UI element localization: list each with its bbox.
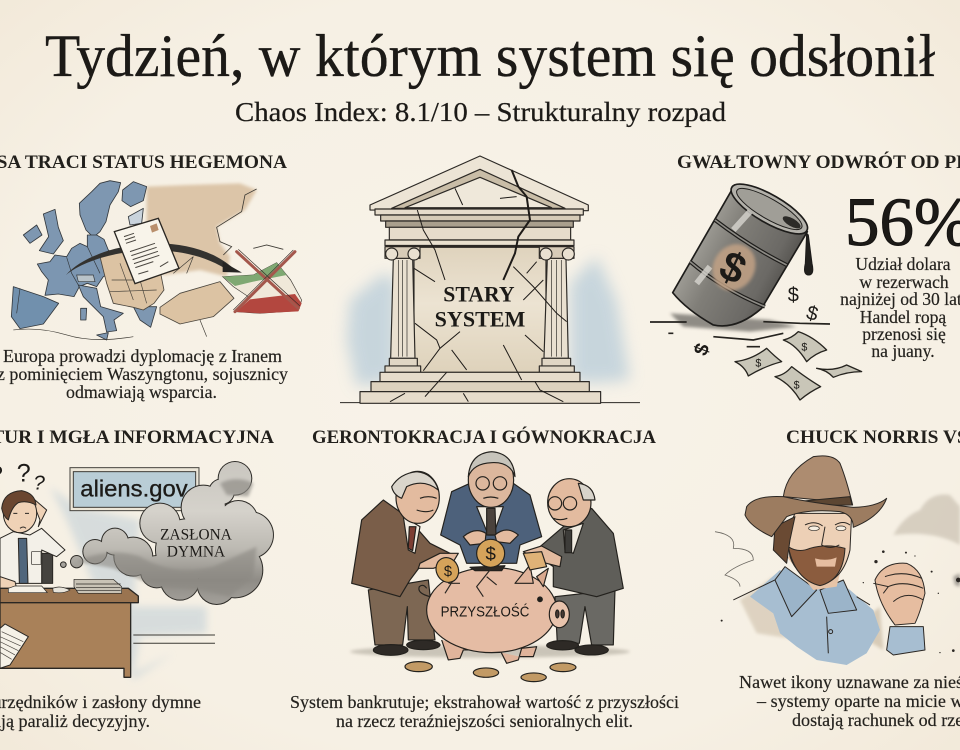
- fist: [875, 563, 925, 625]
- right man: [523, 479, 623, 655]
- temple label: STARY: [443, 282, 515, 306]
- caption: hegemony: [0, 346, 288, 402]
- temple illustration: [340, 156, 640, 403]
- loose dollar signs: $: [804, 302, 820, 326]
- old men and piggy bank illustration: $: [485, 543, 496, 564]
- stat caption: Udział dolara: [855, 254, 951, 274]
- dust specks: [721, 550, 960, 653]
- ground shadow: [350, 646, 630, 658]
- caption: Chuck Norris: [739, 672, 960, 730]
- oil drip: [804, 233, 813, 275]
- barrel dollar sign: $: [713, 241, 754, 293]
- question marks: ?: [33, 471, 45, 494]
- subtitle: Chaos Index: 8.1/10 – Strukturalny rozpad: [235, 97, 727, 127]
- oil barrel illustration: $: [794, 379, 800, 391]
- middle man: [441, 452, 542, 563]
- pig: [419, 565, 569, 663]
- heading: gerontocracy: GERONTOKRACJA I GÓWNOKRACJA: [312, 426, 656, 448]
- stat caption: przenosi się: [862, 324, 946, 344]
- right column: [544, 258, 568, 358]
- iran: [223, 263, 302, 313]
- cowboy portrait illustration: [715, 456, 960, 665]
- sign aliens.gov: [70, 468, 199, 511]
- smoke cloud: [60, 461, 274, 605]
- desk, clerk and smoke illustration: [0, 460, 274, 680]
- wall: [414, 247, 546, 372]
- old men and piggy bank illustration: $: [444, 564, 452, 580]
- left man: [352, 471, 458, 655]
- panel: Chuck Norris: [715, 427, 960, 730]
- eastern europe and turkey: [100, 250, 234, 324]
- stat caption: Handel ropą: [860, 307, 946, 327]
- document: [114, 218, 179, 284]
- map of Europe with arrow to Iran: [11, 181, 302, 340]
- smoke cloud: ZASŁONA: [160, 526, 232, 543]
- smoke cloud: DYMNA: [167, 544, 225, 561]
- question marks: ?: [17, 460, 31, 488]
- caption: hegemony: odmawiają wsparcia.: [66, 382, 217, 402]
- oil puddle: [670, 313, 797, 332]
- watercolor wash: [347, 257, 630, 387]
- arrow: [66, 243, 233, 275]
- clerk: [0, 491, 65, 588]
- pediment: [370, 156, 588, 211]
- shirt: [750, 570, 880, 665]
- coins: [432, 539, 547, 586]
- banknotes: [735, 332, 862, 400]
- title: Tydzień, w którym system się odsłonił: [45, 23, 935, 89]
- oil barrel illustration: $: [801, 342, 807, 354]
- wash: [50, 487, 207, 680]
- panel: information fog: [0, 427, 274, 731]
- caption: gerontocracy: na rzecz teraźniejszości senioralnych elit.: [336, 711, 633, 731]
- stat caption: [840, 254, 960, 361]
- loose dollar signs: [690, 285, 820, 359]
- stat caption: w rezerwach: [859, 272, 949, 292]
- left column: [391, 258, 415, 358]
- hat: [783, 456, 853, 505]
- cracks: [390, 170, 567, 402]
- stat caption: na juany.: [871, 341, 935, 361]
- neck and face: [787, 557, 843, 590]
- western europe: [11, 181, 157, 340]
- caption: gerontocracy: [290, 692, 679, 731]
- temple label: SYSTEM: [435, 308, 525, 332]
- panel: USA loses hegemony: [0, 152, 302, 402]
- oil barrel illustration: [650, 175, 862, 400]
- loose dollar signs: $: [788, 285, 799, 307]
- caption: fog: [0, 692, 201, 731]
- barrel: [673, 187, 807, 326]
- steps: [380, 372, 580, 382]
- loose dollar signs: $: [690, 341, 715, 359]
- paper sheet: [0, 624, 28, 668]
- caption: hegemony: z pominięciem Waszyngtonu, sojusznicy: [0, 364, 288, 384]
- panel: old system temple: [340, 156, 640, 403]
- caption: hegemony: Europa prowadzi dyplomację z Iranem: [3, 346, 282, 366]
- sign aliens.gov: aliens.gov: [80, 476, 188, 502]
- stat caption: najniżej od 30 lat: [840, 289, 960, 309]
- temple label: [435, 282, 525, 332]
- desk: [0, 579, 138, 677]
- caption: gerontocracy: System bankrutuje; ekstrahował wartość z przyszłości: [290, 692, 679, 712]
- oil barrel illustration: $: [755, 358, 761, 370]
- panel: petrodollar: [650, 151, 960, 400]
- russia wash: [143, 183, 257, 277]
- question marks: [0, 460, 45, 494]
- pig label: PRZYSZŁOŚĆ: [441, 603, 529, 621]
- old men and piggy bank illustration: [350, 452, 630, 682]
- dust washes: [740, 494, 960, 650]
- panel: gerontocracy: [290, 426, 679, 731]
